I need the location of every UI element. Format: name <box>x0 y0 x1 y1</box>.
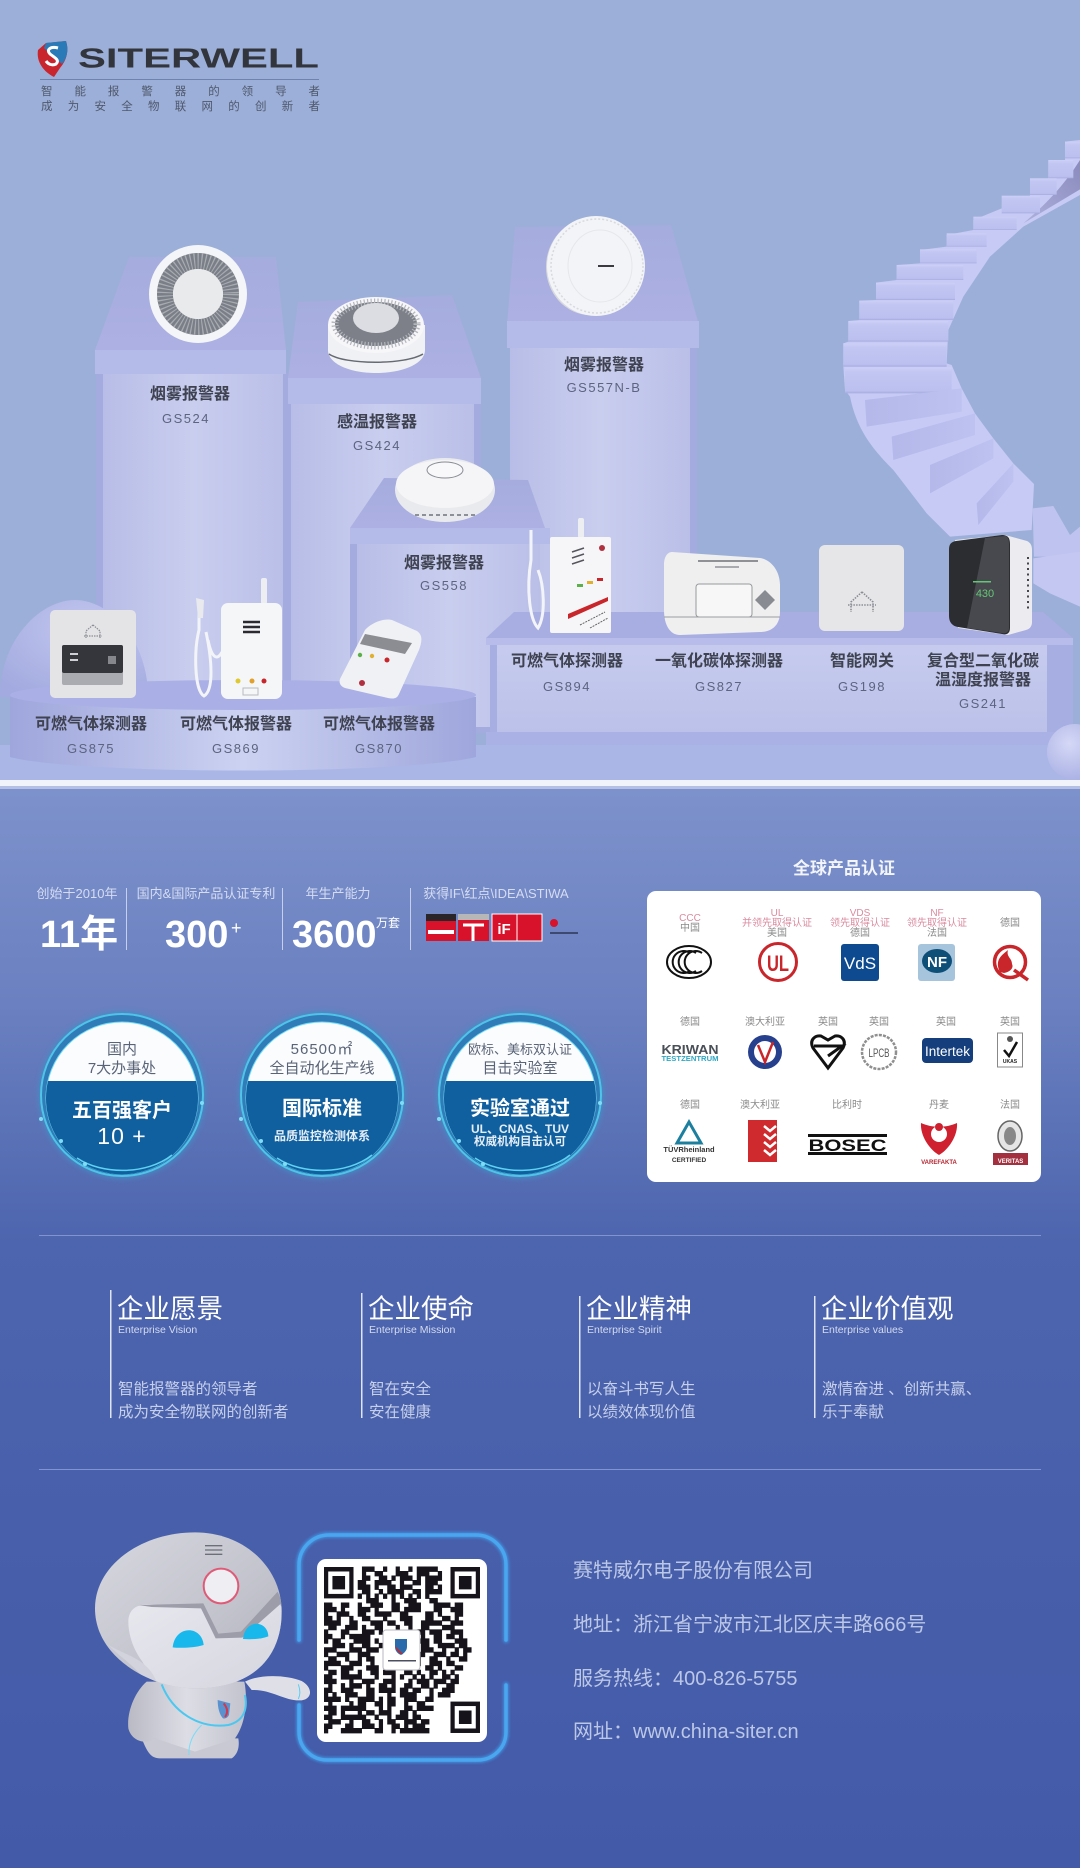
podium: GS558 <box>350 478 550 733</box>
labels: platform products: 温湿度报警器 <box>935 670 1031 689</box>
stat: patents <box>137 886 275 956</box>
product: GS827 <box>664 552 780 635</box>
labels: upper podium products: 烟雾报警器 <box>150 384 230 403</box>
circle badge: production line <box>239 1012 405 1178</box>
logo: Q mark <box>994 946 1028 980</box>
decorative ball <box>1047 724 1080 780</box>
QR centre logo <box>383 1630 420 1670</box>
circle badge: offices: 10 + <box>97 1123 147 1149</box>
logo: VdS: VdS <box>844 954 876 973</box>
enterprise column: mission: 安在健康 <box>369 1403 431 1421</box>
enterprise column: spirit <box>579 1294 696 1421</box>
row 1 captions <box>679 908 1020 939</box>
row 1 captions: CCC <box>679 913 701 924</box>
enterprise column: mission: Enterprise Mission <box>369 1324 456 1336</box>
half dome <box>0 600 148 697</box>
logo: CertiMark <box>748 1120 777 1162</box>
labels: platform products: GS827 <box>695 679 743 694</box>
stat: capacity <box>292 886 400 956</box>
QR frame <box>299 1535 506 1760</box>
circle badge: production line: 56500㎡ <box>291 1041 353 1058</box>
robot arm <box>245 1676 310 1700</box>
labels: stage products: 可燃气体报警器 <box>180 714 292 733</box>
circle badge: production line: 品质监控检测体系 <box>274 1128 370 1143</box>
hero background <box>0 0 1080 781</box>
labels: platform products: 一氧化碳体探测器 <box>655 651 783 670</box>
enterprise column: spirit: Enterprise Spirit <box>587 1324 662 1336</box>
logo: NF <box>918 944 955 981</box>
labels: stage products: GS875 <box>67 741 115 756</box>
round stage <box>10 680 476 770</box>
enterprise column: spirit: 以奋斗书写人生 <box>587 1380 696 1398</box>
stat: capacity: 年生产能力 <box>305 886 371 901</box>
stat: patents: + <box>231 918 242 938</box>
row 1 captions: 德国 <box>1000 916 1020 929</box>
logo: Intertek <box>922 1038 973 1063</box>
logo: Intertek: Intertek <box>925 1044 970 1059</box>
product: GS894 <box>529 518 611 633</box>
robot badge <box>218 1700 230 1719</box>
logo: UKAS <box>998 1033 1022 1067</box>
row 2 captions <box>680 1015 1020 1028</box>
row 3 captions: 德国 <box>680 1098 700 1111</box>
logo: TUV Rheinland: CERTIFIED <box>672 1157 706 1164</box>
labels: stage products: 可燃气体报警器 <box>323 714 435 733</box>
labels: upper podium products: GS524 <box>162 411 210 426</box>
row 3 captions: 法国 <box>1000 1098 1020 1111</box>
stat: capacity: 万套 <box>376 916 400 930</box>
enterprise column: values: 激情奋进 、创新共赢、 <box>822 1380 981 1398</box>
stat: founded <box>37 886 118 956</box>
circle badge: production line: 国际标准 <box>282 1097 362 1120</box>
robot legs <box>142 1738 239 1758</box>
enterprise column: spirit: 企业精神 <box>586 1294 692 1324</box>
contact info: 地址：浙江省宁波市江北区庆丰路666号 <box>573 1613 926 1636</box>
logo: VdS <box>841 944 879 981</box>
labels: upper podium products: GS558 <box>420 578 468 593</box>
labels: platform products: GS198 <box>838 679 886 694</box>
product: GS558 <box>395 458 495 522</box>
icon: award badges: iF <box>497 921 511 938</box>
enterprise column: mission: 智在安全 <box>369 1380 432 1398</box>
row 1 captions: VDS <box>850 908 871 919</box>
circle badge: offices: 五百强客户 <box>72 1098 172 1122</box>
enterprise column: values: 乐于奉献 <box>822 1403 884 1421</box>
product: GS524 <box>149 245 247 343</box>
logo: Bureau Veritas: VERITAS <box>998 1159 1023 1165</box>
labels: upper podium products: 烟雾报警器 <box>404 553 484 572</box>
wordmark: SITERWELL <box>78 42 319 74</box>
logo: Vaerefakta <box>921 1123 958 1166</box>
labels: platform products: GS241 <box>959 696 1007 711</box>
enterprise column: vision: 智能报警器的领导者 <box>118 1380 258 1398</box>
stat: awards <box>423 886 578 941</box>
robot face plate <box>108 1592 285 1692</box>
circle badge: offices <box>39 1012 205 1178</box>
row 2 captions: 英国 <box>869 1015 889 1028</box>
row 2 captions: 英国 <box>936 1015 956 1028</box>
spiral staircase <box>843 140 1080 607</box>
enterprise column: values: 企业价值观 <box>821 1294 954 1324</box>
platform right <box>486 612 1076 745</box>
row 2 captions: 澳大利亚 <box>745 1015 785 1028</box>
labels: platform products: 智能网关 <box>830 651 894 670</box>
product: GS557N-B <box>546 216 645 316</box>
contact info: 服务热线：400-826-5755 <box>573 1667 798 1690</box>
labels: stage products: GS869 <box>212 741 260 756</box>
enterprise column: vision <box>110 1290 289 1421</box>
logo: TUV Rheinland <box>663 1122 715 1164</box>
stats row <box>37 886 578 956</box>
logo: Vaerefakta: VAREFAKTA <box>921 1160 958 1166</box>
logo: Kitemark <box>812 1036 844 1068</box>
product: GS241 <box>949 535 1032 635</box>
row 3 captions: 澳大利亚 <box>740 1098 780 1111</box>
robot head <box>95 1532 282 1688</box>
labels: stage products <box>35 714 435 756</box>
heading: global certification: 全球产品认证 <box>793 858 895 878</box>
stat: patents: 国内&国际产品认证专利 <box>137 886 275 901</box>
labels: upper podium products: 感温报警器 <box>337 412 417 431</box>
icon: award badges <box>426 914 578 941</box>
labels: stage products: GS870 <box>355 741 403 756</box>
contact info: 网址：www.china-siter.cn <box>573 1720 799 1743</box>
enterprise column: values <box>814 1294 981 1421</box>
logo: 成为安全物联网的创新者 <box>41 99 320 113</box>
logo: CCC <box>667 946 711 978</box>
enterprise column: values: Enterprise values <box>822 1324 903 1336</box>
podium: GS557N-B <box>507 225 699 627</box>
row 2 captions: 德国 <box>680 1015 700 1028</box>
stat: capacity: 3600 <box>292 914 377 956</box>
robot vent <box>205 1546 222 1554</box>
row 1 captions: UL <box>771 908 784 919</box>
robot mascot <box>95 1532 310 1758</box>
robot eyes <box>173 1630 204 1648</box>
row 1 captions: 中国 <box>680 921 700 934</box>
contact info: 赛特威尔电子股份有限公司 <box>573 1559 813 1582</box>
circle badge: laboratory: 实验室通过 <box>470 1096 570 1120</box>
contact info <box>573 1559 926 1743</box>
logo: UL: UL <box>767 951 789 976</box>
robot forehead ring <box>204 1569 238 1603</box>
circle badge: offices: 国内 <box>107 1041 137 1058</box>
labels: upper podium products <box>150 355 644 593</box>
QR code <box>317 1559 487 1742</box>
labels: upper podium products: GS557N-B <box>567 380 641 395</box>
labels: stage products: 可燃气体探测器 <box>35 714 147 733</box>
labels: platform products: GS894 <box>543 679 591 694</box>
logo: NF: NF <box>927 954 947 971</box>
logo: TUV Rheinland: TÜVRheinland <box>663 1145 715 1154</box>
logo: UL <box>760 944 796 980</box>
logo: LPCB: LPCB <box>868 1046 890 1060</box>
row 1 captions: 德国 <box>850 926 870 939</box>
circle badge: laboratory: UL、CNAS、TUV <box>471 1122 569 1136</box>
logo <box>38 41 320 113</box>
logo: BOSEC: BOSEC <box>808 1136 886 1155</box>
logo: Activfire <box>748 1035 782 1069</box>
row 1 captions: 领先取得认证 <box>907 916 967 929</box>
labels: platform products <box>511 651 1039 711</box>
enterprise column: vision: 企业愿景 <box>117 1294 223 1324</box>
circle badge: production line: 全自动化生产线 <box>269 1059 375 1077</box>
robot collar <box>162 1684 246 1726</box>
product: GS870 <box>340 619 421 699</box>
robot body <box>128 1682 246 1752</box>
circle badge: laboratory: 权威机构目击认可 <box>474 1134 566 1148</box>
stat: founded: 11年 <box>40 914 118 956</box>
slogan: 智能报警器的领导者 <box>41 84 320 98</box>
stat: patents: 300 <box>165 914 228 956</box>
podium: GS524 <box>95 257 291 693</box>
floor <box>0 745 1080 781</box>
enterprise column: vision: Enterprise Vision <box>118 1324 197 1336</box>
stat: awards: 获得IF\红点\IDEA\STIWA <box>423 886 569 901</box>
stat: founded: 创始于2010年 <box>37 886 117 901</box>
row 3 captions: 丹麦 <box>929 1099 949 1111</box>
circle badge: laboratory: 欧标、美标双认证 <box>468 1042 572 1057</box>
podium: GS424 <box>288 295 481 693</box>
logo: BOSEC <box>808 1134 887 1155</box>
product: GS869 <box>196 578 282 699</box>
labels: platform products: 可燃气体探测器 <box>511 651 623 670</box>
row 1 captions: NF <box>930 908 944 919</box>
row 1 captions: 领先取得认证 <box>830 916 890 929</box>
product: GS241: 430 <box>976 588 994 600</box>
icon: shield <box>38 41 67 77</box>
labels: upper podium products: 烟雾报警器 <box>564 355 644 374</box>
labels: upper podium products: GS424 <box>353 438 401 453</box>
product: GS875 <box>50 610 136 698</box>
enterprise column: mission <box>361 1293 474 1421</box>
product: GS424 <box>328 297 425 373</box>
enterprise column: mission: 企业使命 <box>368 1294 474 1324</box>
panel: certifications <box>647 891 1041 1182</box>
labels: platform products: 复合型二氧化碳 <box>927 651 1039 670</box>
lower blue background <box>0 789 1080 1868</box>
row 3 captions: 比利时 <box>832 1099 862 1111</box>
separator band <box>0 780 1080 789</box>
row 1 captions: 并领先取得认证 <box>742 916 812 929</box>
row 2 captions: 英国 <box>1000 1015 1020 1028</box>
circle badge: laboratory: 目击实验室 <box>482 1060 558 1077</box>
finder patterns <box>326 1569 478 1731</box>
enterprise column: spirit: 以绩效体现价值 <box>587 1403 696 1421</box>
product: GS198 <box>819 545 904 631</box>
circle badge: offices: 7大办事处 <box>88 1060 156 1077</box>
logo: UKAS: UKAS <box>1003 1059 1018 1065</box>
logo: LPCB <box>862 1035 896 1069</box>
row 3 captions <box>680 1098 1020 1111</box>
circle badge: laboratory <box>437 1012 603 1178</box>
logo: KRIWAN <box>662 1042 718 1063</box>
row 1 captions: 法国 <box>927 926 947 939</box>
logo: KRIWAN: KRIWAN <box>662 1042 718 1057</box>
logo: KRIWAN: TESTZENTRUM <box>662 1054 718 1063</box>
row 2 captions: 英国 <box>818 1015 838 1028</box>
logo: Bureau Veritas <box>993 1121 1028 1165</box>
row 1 captions: 美国 <box>767 926 787 939</box>
enterprise column: vision: 成为安全物联网的创新者 <box>118 1403 289 1421</box>
